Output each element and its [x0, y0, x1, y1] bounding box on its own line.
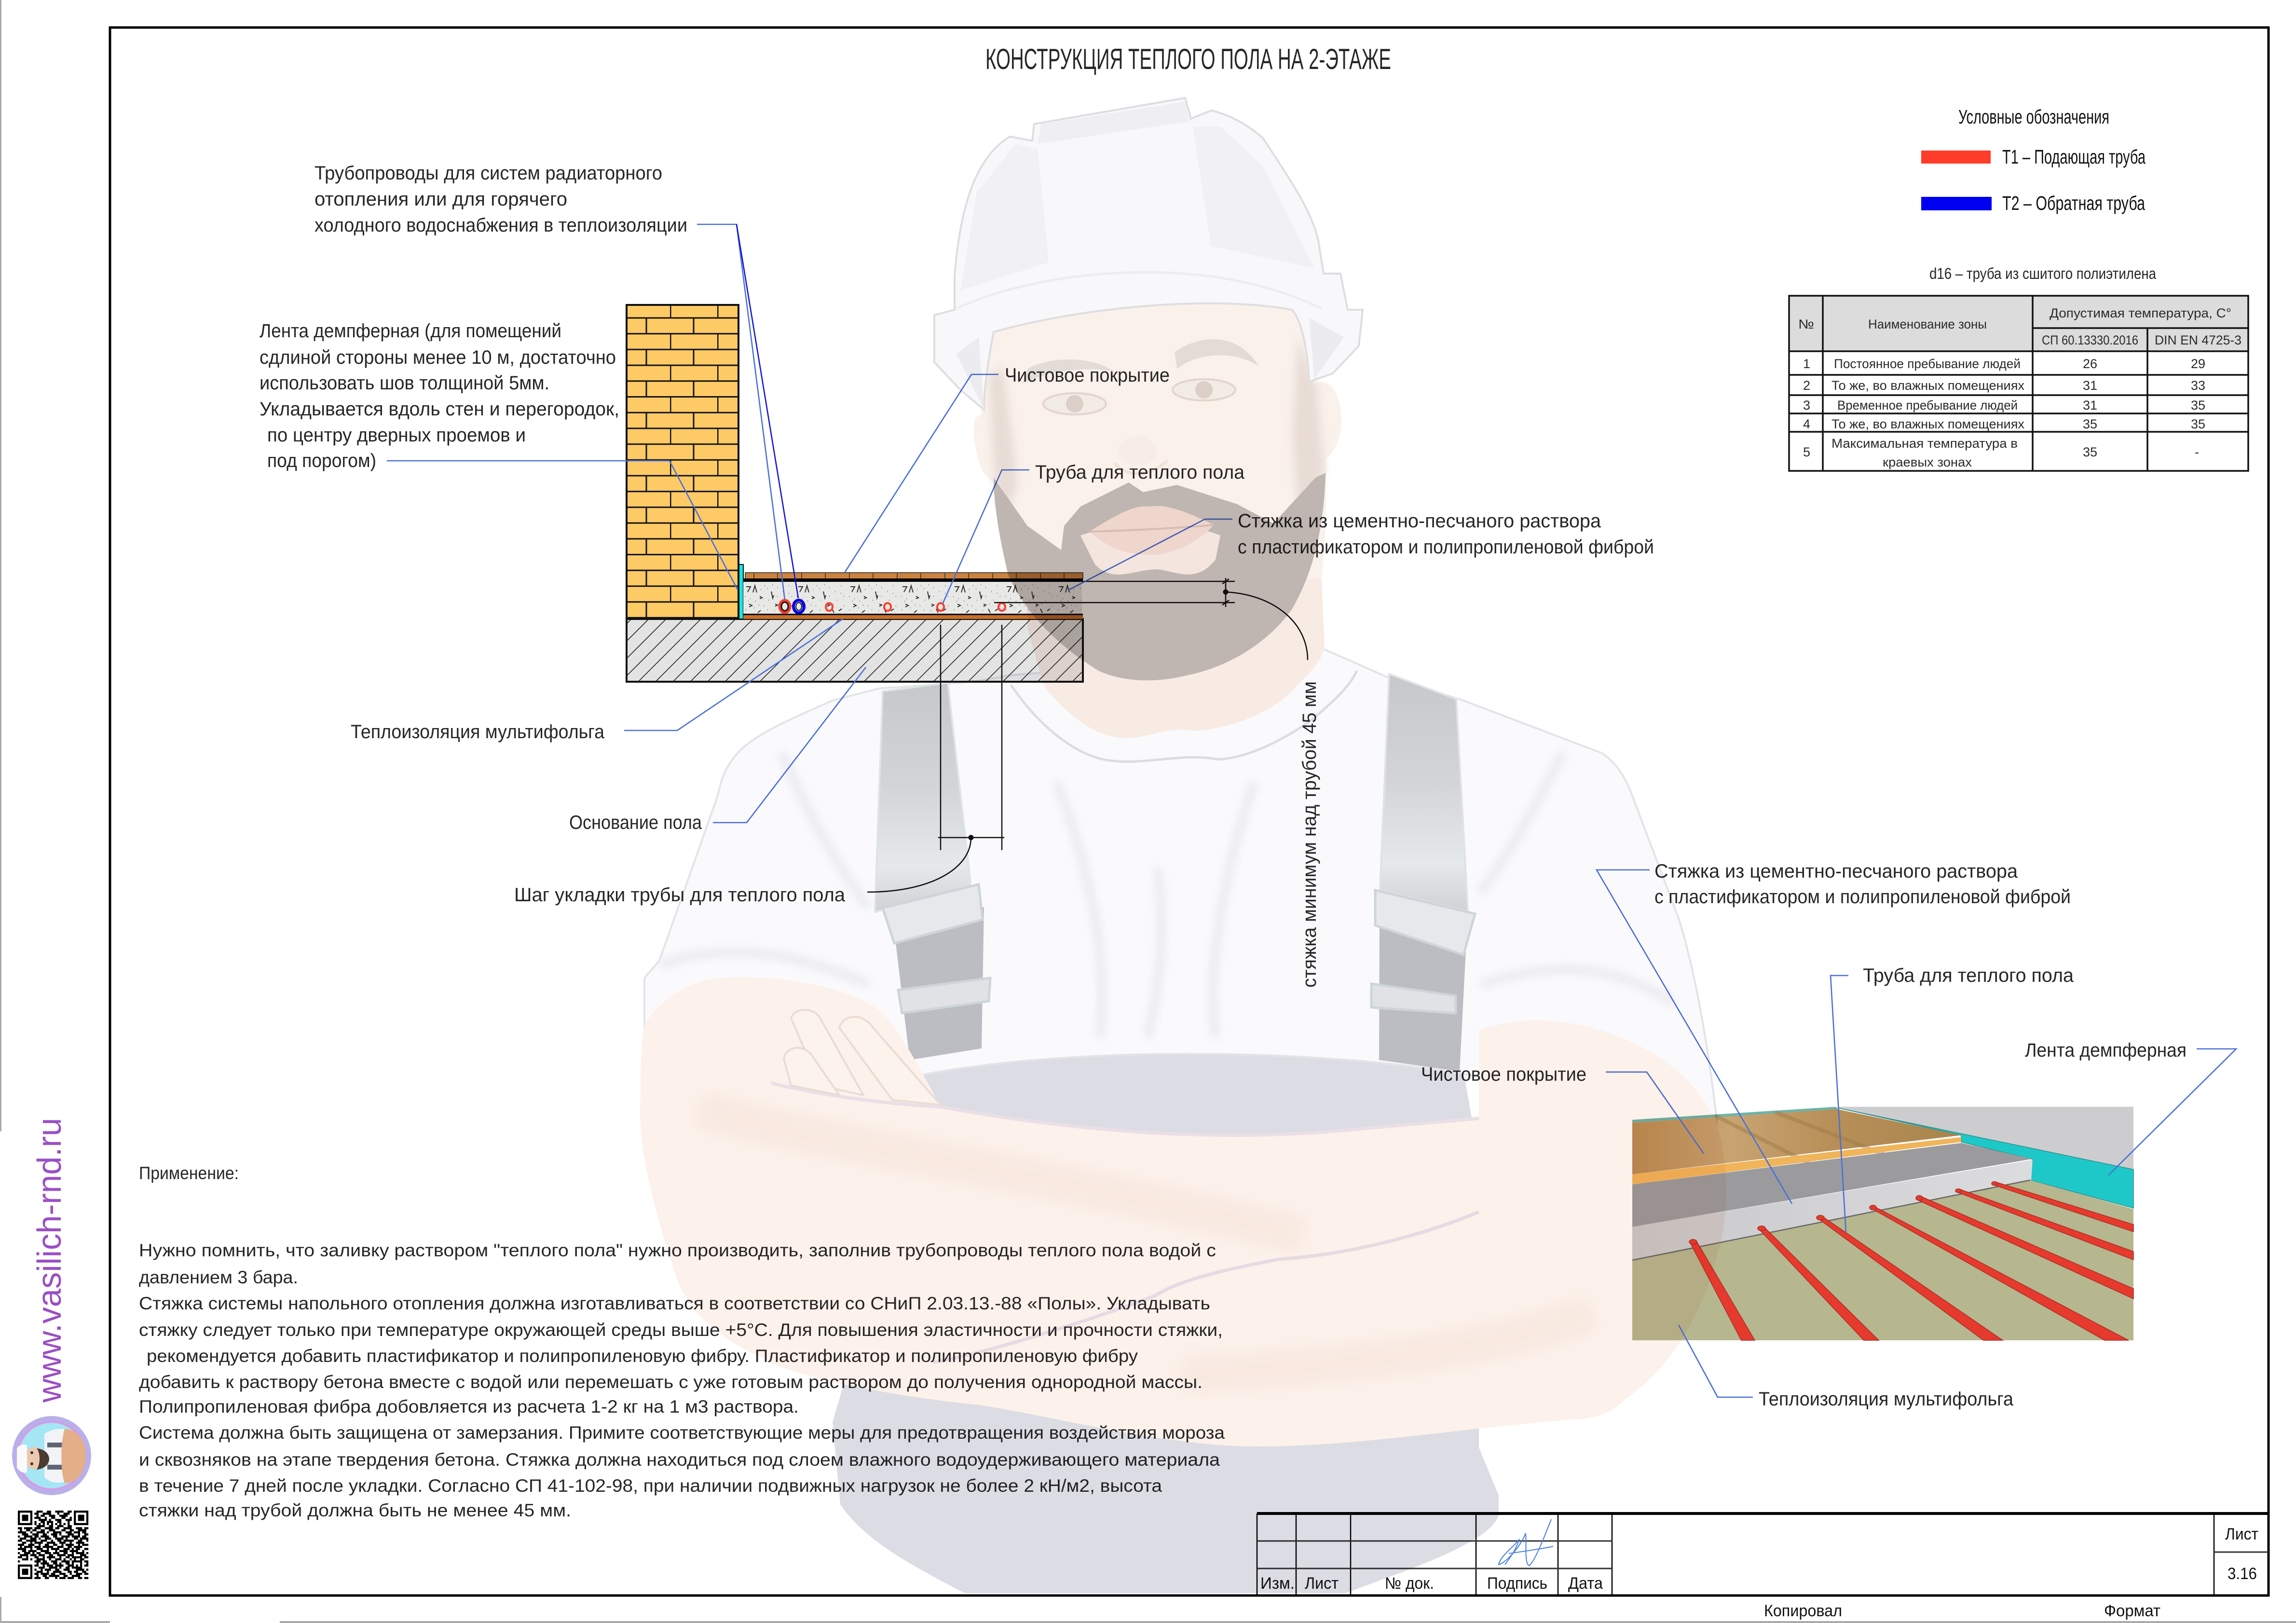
- callout 3D: damper tape: Лента демпферная: [2025, 1040, 2187, 1061]
- temperature table: 2: [1803, 378, 1810, 393]
- screed side: [1632, 1160, 2033, 1260]
- callout: damper tape: [260, 320, 738, 590]
- callout: pipe pitch: Шаг укладки трубы для теплого пола: [514, 884, 846, 906]
- callout: pipes in insulation: холодного водоснабжения в теплоизоляции: [314, 215, 687, 236]
- title: КОНСТРУКЦИЯ ТЕПЛОГО ПОЛА НА 2-ЭТАЖЕ: [985, 43, 1391, 75]
- callout 3D: finish coating: Чистовое покрытие: [1421, 1064, 1586, 1085]
- temperature table: 31: [2083, 378, 2097, 393]
- shirt folds: [661, 753, 1674, 1037]
- title block: № док.: [1385, 1574, 1434, 1593]
- pipe note: d16 – труба из сшитого полиэтилена: [1929, 265, 2156, 282]
- heating pipes section: [779, 600, 1005, 613]
- temperature table: 1: [1803, 357, 1810, 371]
- watermark: worker illustration: [640, 98, 1726, 1593]
- temperature table: 35: [2191, 417, 2205, 431]
- hand fingers: [784, 1010, 941, 1105]
- face: [973, 301, 1341, 579]
- legend: Условные обозначения: [1958, 106, 2109, 128]
- legend: Т2 – Обратная труба: [2002, 192, 2145, 214]
- callout 3D: finish coating: [1421, 1064, 1704, 1154]
- temperature table: 29: [2191, 357, 2205, 371]
- damper tape: [739, 564, 743, 619]
- temperature table: 5: [1803, 445, 1810, 459]
- callout: base: Основание пола: [569, 812, 702, 833]
- footer labels: Копировал: [1764, 1602, 1842, 1620]
- callout 3D: damper tape: [2025, 1040, 2236, 1175]
- legend: [1921, 106, 2146, 214]
- screed top: [1632, 1143, 2033, 1227]
- title block: Дата: [1568, 1574, 1603, 1593]
- callout: screed: [1068, 510, 1654, 590]
- temperature table: 35: [2083, 445, 2097, 459]
- temperature table: Наименование зоны: [1868, 317, 1987, 331]
- title block: Лист: [2225, 1525, 2258, 1543]
- red pipes: [1689, 1182, 2133, 1340]
- callout: screed: Стяжка из цементно-песчаного раствора: [1238, 510, 1601, 532]
- logo badge: [12, 1416, 91, 1495]
- application notes text: Стяжка системы напольного отопления должна изготавливаться в соответствии со СНиП 2.03.13.-88 «Полы». Укладывать: [139, 1293, 1210, 1313]
- temperature table: DIN EN 4725-3: [2155, 333, 2241, 347]
- temperature table: 35: [2083, 417, 2097, 431]
- callout: insulation: Теплоизоляция мультифольга: [351, 721, 605, 743]
- title block: 3.16: [2228, 1565, 2257, 1583]
- dimension: pipe pitch: [867, 625, 1004, 892]
- callout: heating pipe: [943, 462, 1245, 604]
- application notes text: в течение 7 дней после укладки. Согласно СП 41-102-98, при наличии подвижных нагрузок не более 2 кН/м2, высота: [139, 1476, 1162, 1496]
- temperature table: Постоянное пребывание людей: [1834, 357, 2021, 371]
- collar: [1011, 671, 1357, 762]
- application notes text: добавить к раствору бетона вместе с водой или перемешать с уже готовым раствором до получения однородной массы.: [139, 1372, 1203, 1392]
- title block: [1257, 1513, 2269, 1595]
- callout: pipes in insulation: Трубопроводы для систем радиаторного: [314, 163, 662, 184]
- temperature table: [1789, 296, 2248, 471]
- insulation: [1632, 1180, 2133, 1340]
- rotated screed note: стяжка минимум над трубой 45 мм: [1299, 681, 1320, 988]
- temperature table: Временное пребывание людей: [1837, 398, 2018, 413]
- application notes text: Полипропиленовая фибра добовляется из расчета 1-2 кг на 1 м3 раствора.: [139, 1397, 799, 1417]
- legend: Т1 – Подающая труба: [2002, 146, 2146, 168]
- signature: [1499, 1519, 1553, 1566]
- callout: damper tape: Лента демпферная (для помещений: [260, 320, 561, 342]
- application notes text: Система должна быть защищена от замерзания. Примите соответствующие меры для предотвращения воздействия мороза: [139, 1423, 1225, 1443]
- temperature table: СП 60.13330.2016: [2042, 333, 2138, 347]
- temperature table: 26: [2083, 357, 2097, 371]
- apron: [833, 1051, 1499, 1593]
- callout 3D: heating pipe: Труба для теплого пола: [1863, 965, 2074, 986]
- eyes and brows: [1023, 339, 1259, 474]
- callout: pipes in insulation: [314, 163, 798, 600]
- temperature table: То же, во влажных помещениях: [1831, 378, 2025, 393]
- temperature table: То же, во влажных помещениях: [1831, 417, 2025, 431]
- callout: screed: с пластификатором и полипропиленовой фиброй: [1238, 536, 1654, 558]
- 3D floor illustration: [1632, 1107, 2133, 1340]
- shirt: [644, 649, 1717, 1124]
- footer labels: Формат: [2104, 1602, 2160, 1620]
- temperature table: Допустимая температура, С°: [2050, 306, 2231, 320]
- brick wall: [627, 305, 738, 619]
- title block: Лист: [1305, 1574, 1339, 1593]
- callout: damper tape: Укладывается вдоль стен и перегородок,: [260, 399, 619, 420]
- wall: [1837, 1107, 2133, 1169]
- crossed arms: [640, 977, 1726, 1446]
- title block: Подпись: [1487, 1574, 1547, 1593]
- helmet: [934, 98, 1363, 410]
- board edge: [1632, 1137, 1961, 1184]
- callout: damper tape: по центру дверных проемов и: [267, 425, 526, 446]
- callout 3D: screed: с пластификатором и полипропиленовой фиброй: [1654, 886, 2071, 908]
- chin and lips: [1080, 506, 1220, 575]
- damper tape 3D: [1839, 1108, 2133, 1208]
- callout: heating pipe: Труба для теплого пола: [1035, 462, 1245, 483]
- insulation layer: [743, 614, 1083, 619]
- callout: base: [569, 667, 866, 833]
- stubble: [989, 338, 1324, 521]
- callout: damper tape: сдлиной стороны менее 10 м, достаточно: [260, 347, 616, 368]
- dimension: screed height: [994, 578, 1308, 660]
- right strap: [1371, 674, 1475, 1072]
- temperature table: 33: [2191, 378, 2205, 393]
- callout 3D: insulation: Теплоизоляция мультифольга: [1759, 1389, 2014, 1410]
- application notes text: рекомендуется добавить пластификатор и полипропиленовую фибру. Пластификатор и полипропиленовую фибру: [147, 1346, 1138, 1366]
- QR code: [18, 1511, 88, 1579]
- neck: [1027, 579, 1325, 738]
- callout: damper tape: использовать шов толщиной 5мм.: [260, 372, 549, 394]
- temperature table: краевых зонах: [1883, 455, 1972, 469]
- website vertical: www.vasilich-rnd.ru: [30, 1118, 68, 1403]
- callout: insulation: [351, 619, 843, 743]
- temperature table: -: [2195, 445, 2199, 459]
- temperature table: 35: [2191, 398, 2205, 413]
- application notes text: Применение:: [139, 1163, 239, 1183]
- wood flooring: [1632, 1109, 1961, 1174]
- base slab: [627, 619, 1083, 682]
- application notes text: и сквозняков на этапе твердения бетона. Стяжка должна находиться под слоем влажного водоудерживающего материала: [139, 1450, 1220, 1470]
- callout: finish coating: Чистовое покрытие: [1005, 365, 1170, 386]
- temperature table: 3: [1803, 398, 1810, 413]
- finish floor layer: [743, 573, 1083, 582]
- application notes text: стяжку следует только при температуре окружающей среды выше +5°С. Для повышения эластичности и прочности стяжки,: [139, 1320, 1223, 1340]
- callout 3D: heating pipe: [1831, 965, 2074, 1233]
- floor section diagram: [627, 305, 1308, 892]
- callout 3D: insulation: [1679, 1325, 2014, 1410]
- left strap: [875, 683, 990, 1060]
- callout: pipes in insulation: отопления или для горячего: [314, 189, 567, 210]
- callout: damper tape: под порогом): [267, 450, 376, 471]
- title block: Изм.: [1260, 1574, 1295, 1593]
- application notes text: Нужно помнить, что заливку раствором "теплого пола" нужно производить, заполнив трубопроводы теплого пола водой с: [139, 1240, 1216, 1260]
- screed layer: [743, 582, 1082, 614]
- callout 3D: screed: [1597, 861, 2071, 1204]
- application notes text: давлением 3 бара.: [139, 1267, 298, 1287]
- callout 3D: screed: Стяжка из цементно-песчаного раствора: [1654, 861, 2018, 882]
- beard: [994, 473, 1326, 680]
- application notes text: стяжки над трубой должна быть не менее 45 мм.: [139, 1500, 571, 1520]
- footer labels: [1764, 1602, 2160, 1620]
- temperature table: №: [1798, 317, 1814, 331]
- callout: finish coating: [845, 365, 1170, 573]
- temperature table: Максимальная температура в: [1831, 436, 2018, 451]
- temperature table: 4: [1803, 417, 1810, 431]
- application notes text: [139, 1163, 1225, 1520]
- temperature table: 31: [2083, 398, 2097, 413]
